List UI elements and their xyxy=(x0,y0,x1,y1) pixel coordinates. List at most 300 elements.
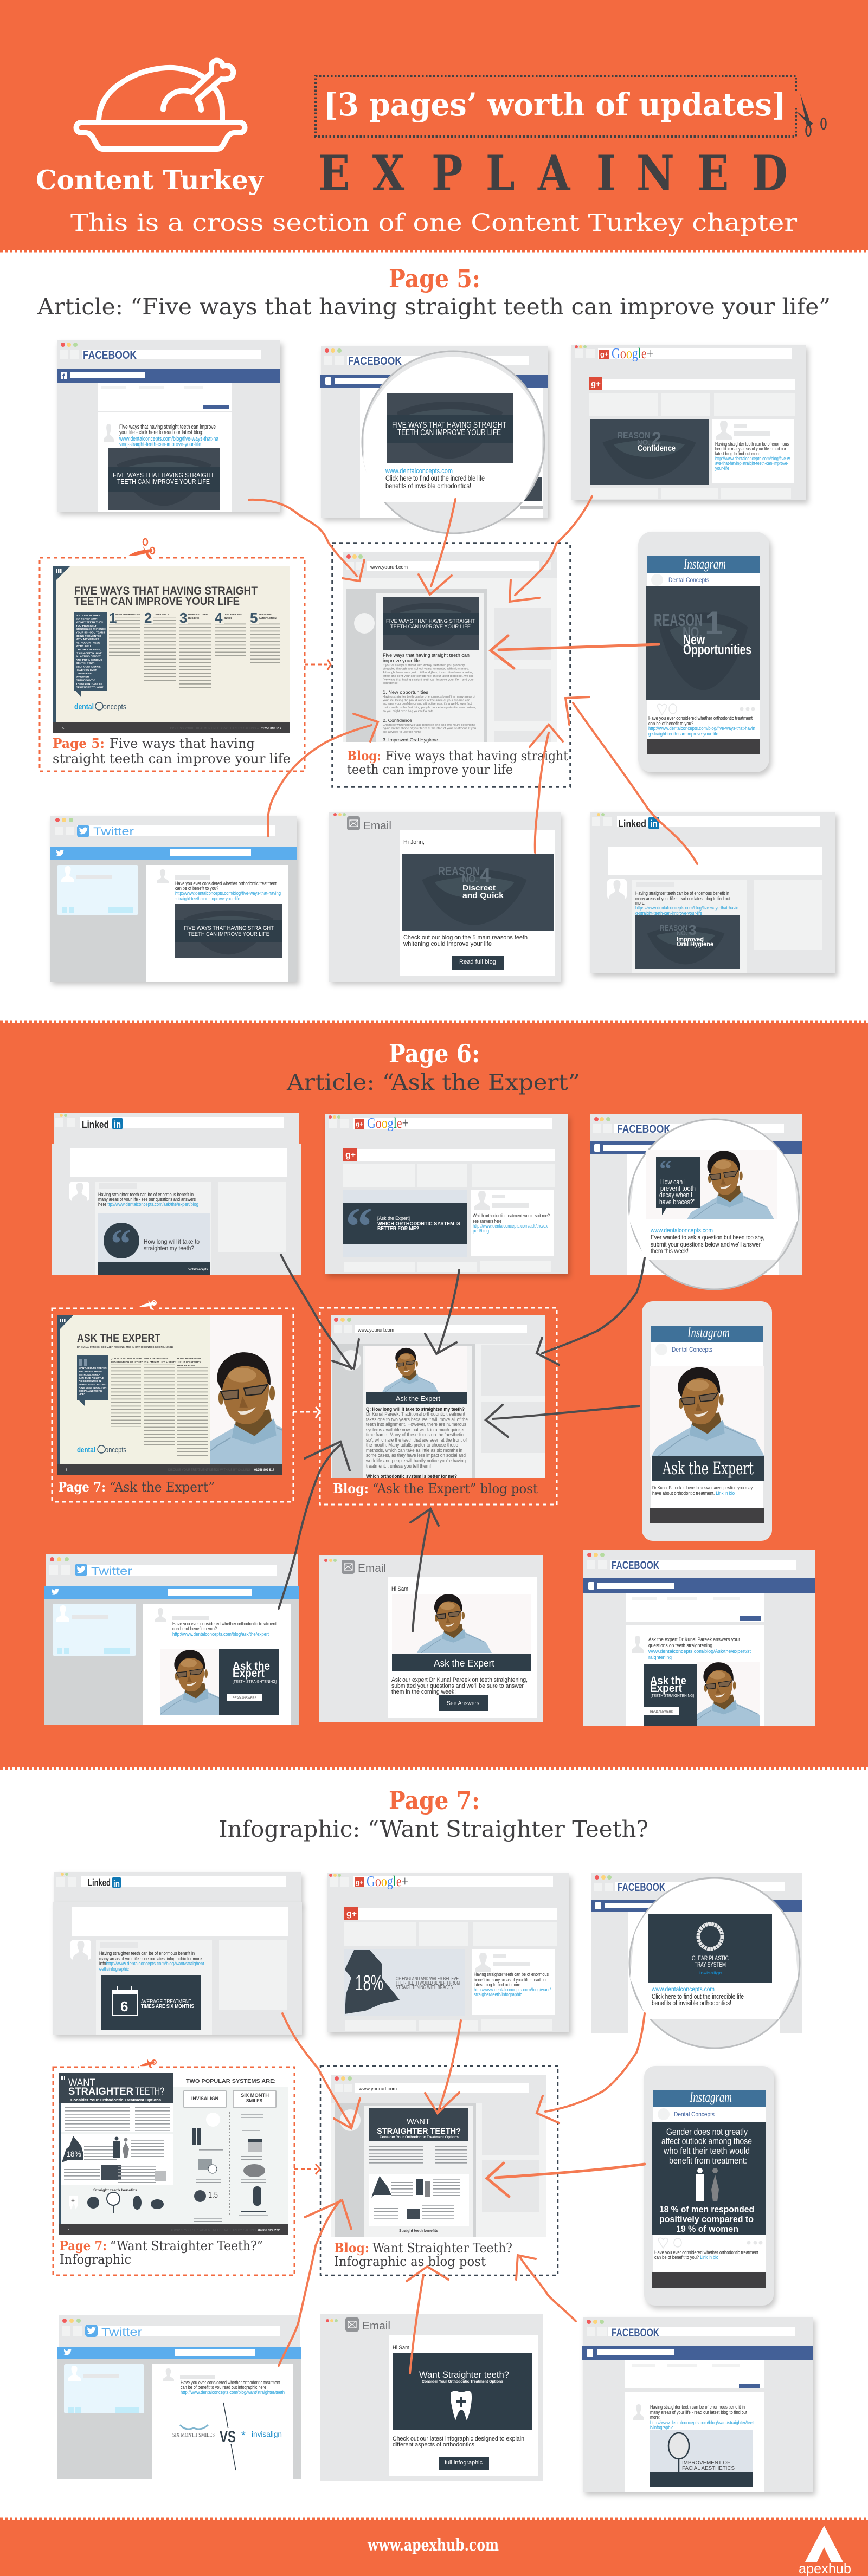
pull quote: CHILDHOOD JIBES, xyxy=(76,648,101,651)
window: facebook 4: Ask the expert Dr Kunal Pareek answers your xyxy=(648,1637,740,1643)
window: google plus: NO. xyxy=(637,438,650,447)
magnifier circle xyxy=(629,1119,799,1289)
phone: instagram 3: can be of benefit to you? Link in bio xyxy=(654,2255,718,2261)
pull quote: SELF-CONFIDENCE. xyxy=(76,666,101,669)
window: email 3: Check out our latest infographic designed to explain xyxy=(393,2436,524,2442)
pull quote: CAN TAKE AS LITTLE xyxy=(79,1377,104,1379)
window: google plus: http://www.dentalconcepts.com/blog/five-w xyxy=(715,456,790,462)
left text blocks xyxy=(61,2103,173,2185)
pull quote: YOUR SCHOOL YEARS xyxy=(76,631,105,634)
phone: instagram 3: Gender does not greatly xyxy=(666,2127,748,2137)
magnifier circle: them this week! xyxy=(651,1247,689,1255)
pull quote: YOU PROBABLY xyxy=(76,624,97,628)
window: facebook 6: IMPROVEMENT OF xyxy=(682,2460,730,2466)
cut-out headline box xyxy=(316,76,799,137)
arrows: section 3 xyxy=(279,2013,645,2373)
five numbered columns: DISCREET AND xyxy=(224,613,242,616)
like icons xyxy=(657,704,677,715)
window: twitter 3: Have you ever considered whether orthodontic treatment xyxy=(181,2380,280,2386)
section 2 band xyxy=(0,1022,868,1768)
window: facebook 1 xyxy=(57,340,280,512)
window: twitter 2: Ask the xyxy=(233,1660,270,1673)
window: facebook 2 with magnifier: FACEBOOK xyxy=(348,355,402,367)
pull quote: AS SIX MONTHS IN xyxy=(79,1380,101,1383)
three q&a columns: Q: HOW LONG WILL IT TAKE xyxy=(111,1357,142,1360)
window: google plus 2 xyxy=(325,1114,568,1274)
logo: oncepts xyxy=(105,1445,126,1455)
window: email 1: and Quick xyxy=(462,891,504,900)
window: linkedin 1: REASON xyxy=(660,924,687,933)
footer bar: 01256 893 517 xyxy=(254,1469,275,1472)
window: facebook 5 with magnifier xyxy=(591,1873,802,2048)
panel: blog page 7: STRAIGHTER TEETH? xyxy=(377,2127,461,2136)
window: google plus 2: BETTER FOR ME? xyxy=(377,1226,419,1232)
window: email 1: whitening could improve your life xyxy=(403,941,492,947)
phone: instagram 3: Have you ever considered whether orthodontic treatment xyxy=(654,2250,758,2256)
magnifier circle: www.dentalconcepts.com xyxy=(385,467,453,475)
blog text: work life and people will hardly notice you're having xyxy=(365,1458,466,1463)
window: google plus 2: “ xyxy=(345,1196,372,1256)
blog text: takes one to two years because it will move all of the xyxy=(366,1417,468,1422)
icon: scissors xyxy=(795,94,826,136)
magnifier circle: How can I xyxy=(660,1178,686,1186)
three q&a columns: TOOTH DECAY WHEN I xyxy=(177,1360,202,1364)
window: facebook 6: Having straighter teeth can be of enormous benefit in xyxy=(650,2404,745,2410)
window: google plus 3 xyxy=(327,1873,569,2032)
window: linkedin 2: in xyxy=(114,1119,121,1130)
pull quote: BEING TORMENTED xyxy=(76,635,101,638)
window: email 2: See Answers xyxy=(447,1700,479,1707)
phone: instagram 2: Ask the Expert xyxy=(662,1458,754,1479)
pull quote: LIFE" xyxy=(79,1393,85,1396)
panel: blog page 7: WANT xyxy=(407,2117,430,2126)
pull quote: WERE JUST xyxy=(76,645,91,648)
window: google plus: g+ xyxy=(591,379,601,389)
six month smiles vs invisalign: * xyxy=(241,2430,246,2442)
magnifier circle: prevent tooth xyxy=(660,1184,696,1192)
window: facebook 1: www.dentalconcepts.com/blog/five-ways-that-ha xyxy=(119,436,219,442)
window: twitter 3: Twitter xyxy=(101,2326,142,2339)
pull quote: TREATMENT CAN BE xyxy=(76,682,103,686)
window: facebook 6: FACIAL AESTHETICS xyxy=(682,2465,735,2471)
window: facebook 4: [TEETH STRAIGHTENING] xyxy=(651,1694,694,1698)
blog text: your life. Being the proud owner of the smile of your dreams can xyxy=(383,699,470,702)
footer bar xyxy=(57,1464,282,1475)
icon: turkey xyxy=(76,61,245,149)
panel: article page 5 xyxy=(40,539,305,771)
window: google plus xyxy=(571,345,806,500)
window: linkedin 1: Linked xyxy=(618,818,646,829)
icon: email xyxy=(345,2317,359,2332)
section heading: page 7 xyxy=(218,1786,648,1842)
system comparison columns xyxy=(184,2091,276,2222)
caption: Blog: xyxy=(347,748,381,764)
panel: article page 6 xyxy=(52,1300,326,1502)
pull quote: HAVE YOU EVER xyxy=(76,669,98,672)
pull quote: SOCIAL AND WORK xyxy=(79,1390,102,1392)
window: google plus 3: http://www.dentalconcepts.com/blog/want/ xyxy=(474,1987,551,1993)
panel: blog page 7: Consider Your Orthodontic Treatment Options xyxy=(380,2135,459,2139)
blog text: struggled through your school years tormented with nicknames. xyxy=(383,668,469,671)
window: google plus 2: see answers here xyxy=(473,1218,501,1224)
arrow: magnifier to blog xyxy=(419,499,455,595)
blog text: again on the shade of your teeth at the start of your treatment. If you xyxy=(383,727,476,731)
caption: teeth can improve your life xyxy=(347,762,513,777)
magnifier circle: invisalign xyxy=(699,1972,722,1975)
window: google plus 2: Google+ xyxy=(367,1115,409,1131)
phone: instagram 1: g-straight-teeth-can-improve-your-life xyxy=(648,731,718,737)
window: google plus 3: straigher/teeth/infographic xyxy=(474,1992,522,1998)
window: facebook 4: raightening xyxy=(648,1655,672,1661)
phone: instagram 3: Dental Concepts xyxy=(674,2110,715,2118)
panel: article page 5: TEETH CAN IMPROVE YOUR LIFE xyxy=(74,595,240,608)
logo wordmark: Content Turkey xyxy=(36,164,265,196)
window: google plus 3: OF ENGLAND AND WALES BELIEVE xyxy=(396,1976,459,1982)
pull quote: ORTHODONTIC xyxy=(76,679,95,682)
window: email 2: Email xyxy=(358,1563,386,1574)
pull quote xyxy=(74,612,107,698)
window: twitter 2: http://www.dentalconcepts.com/blog/ask/the/expert xyxy=(172,1631,269,1637)
window: facebook 1: ving-straight-teeth-can-improve-your-life xyxy=(119,441,201,448)
window: facebook 4: FACEBOOK xyxy=(612,1559,659,1572)
phone: instagram 2: Instagram xyxy=(687,1325,730,1340)
window: email 1: REASON xyxy=(438,864,480,878)
subtitle: This is a cross section of one Content Turkey chapter xyxy=(70,209,798,237)
window: google plus 2: WHICH ORTHODONTIC SYSTEM IS xyxy=(377,1221,460,1227)
arrow: article to blog xyxy=(305,660,331,670)
panel: blog page 7: www.yoururl.com xyxy=(358,2086,397,2091)
window: twitter 3: can be of benefit to you read out infographic here xyxy=(181,2385,266,2391)
five numbered columns: 4 xyxy=(215,610,223,626)
window: linkedin 1: https://www.dentalconcepts.com/blog/five-ways-that-havin xyxy=(635,905,738,911)
hero image xyxy=(108,448,220,510)
blog text xyxy=(383,653,476,743)
window: linkedin 3: infohttp://www.dentalconcepts.com/blog/want/straigher/t xyxy=(99,1961,204,1967)
window: facebook 2 with magnifier xyxy=(320,346,548,533)
caption: Five ways that having xyxy=(110,736,255,751)
arrow: google plus to blog xyxy=(425,2020,461,2113)
window: google plus: Confidence xyxy=(638,444,676,453)
window: facebook 4: Ask the xyxy=(650,1675,686,1687)
window: linkedin 1: 3 xyxy=(689,922,696,938)
window: google plus 3: STRAIGHTENING WITH BRACES xyxy=(396,1985,453,1991)
window: linkedin 3: Linked xyxy=(88,1877,111,1888)
caption: Infographic as blog post xyxy=(334,2254,486,2269)
system comparison columns: SMILES xyxy=(246,2098,262,2103)
arrows: section 1 xyxy=(249,496,697,864)
phone: instagram 2: have about orthodontic treatment. Link in bio xyxy=(652,1490,735,1496)
system comparison columns: 1.5 xyxy=(208,2191,218,2200)
panel: blog page 5: www.yoururl.com xyxy=(370,564,408,570)
magnifier circle: FIVE WAYS THAT HAVING STRAIGHT xyxy=(392,421,506,430)
window: linkedin 1: NO. xyxy=(677,929,687,937)
window: twitter 2: Twitter xyxy=(91,1565,132,1578)
window: facebook 6: many areas of your life - read our latest blog to find out xyxy=(650,2410,747,2416)
pull quote: ALTHOUGH THESE xyxy=(76,641,100,644)
panel: blog page 5: FIVE WAYS THAT HAVING STRAIGHT xyxy=(386,618,475,624)
footer bar xyxy=(59,2224,288,2235)
phone: instagram 1: Opportunities xyxy=(683,641,751,657)
blog text: effect and dent your self-confidence. In our latest blog post, we list xyxy=(383,675,473,678)
five numbered columns: CONFIDENCE xyxy=(153,613,169,616)
section heading: page 5: Article: “Five ways that having straight teeth can improve your life” xyxy=(37,294,831,320)
window: google plus: 2 xyxy=(652,429,661,448)
phone: instagram 1: NO. xyxy=(683,624,702,641)
arrow: google plus to blog xyxy=(510,496,592,602)
window: email 1: Discreet xyxy=(462,883,496,893)
six month smiles vs invisalign: SIX MONTH SMILES xyxy=(172,2432,215,2438)
window: google plus 3: g+ xyxy=(346,1909,357,1919)
window: email 1: Email xyxy=(363,820,391,832)
window: twitter 1: Have you ever considered whether orthodontic treatment xyxy=(175,881,277,887)
caption: “Ask the Expert” blog post xyxy=(372,1481,538,1496)
arrow: instagram to blog xyxy=(491,636,659,668)
caption: Infographic xyxy=(60,2252,131,2267)
five numbered columns: IMPROVED ORAL xyxy=(188,613,209,616)
window: linkedin 3: in xyxy=(113,1878,120,1889)
pull quote: CONSIDERED xyxy=(76,672,94,675)
blog text: Five ways that having straight teeth can xyxy=(383,653,470,658)
window: email 2: submitted your questions and we'll be sure to answer xyxy=(391,1683,524,1689)
panel: article page 5: FIVE WAYS THAT HAVING STRAIGHT xyxy=(74,585,258,597)
panel: blog page 6 xyxy=(320,1308,557,1505)
window: google plus 2: Which orthodontic treatment would suit me? xyxy=(473,1213,550,1219)
phone: instagram 3: Instagram xyxy=(689,2089,732,2105)
caption: Blog: xyxy=(334,2240,369,2256)
three q&a columns: HAVE BRACES? xyxy=(177,1364,195,1367)
window: facebook 6: more: xyxy=(650,2414,660,2420)
panel: article page 6: DR KUNAL PAREEK, BDS MJDF RCS(ENG) MSC IN ORTHODONTICS GDC NO. 105817 xyxy=(77,1346,173,1349)
window: google plus 2: [Ask the Expert] xyxy=(377,1216,410,1221)
three q&a columns: HOW CAN I PREVENT xyxy=(177,1357,201,1360)
icon: scissors xyxy=(139,1300,156,1310)
section heading: page 5 xyxy=(37,264,831,320)
window: twitter 1: http://www.dentalconcepts.com/blog/five-ways-that-having xyxy=(175,890,281,896)
window: google plus 3: latest blog to find out more: xyxy=(474,1982,522,1988)
window: twitter 3: http://www.dentalconcepts.com/blog/want/straighter/teeth xyxy=(181,2390,285,2396)
window: linkedin 3 xyxy=(53,1872,302,2035)
window: google plus 3: benefit in many areas of your life - read our xyxy=(474,1977,547,1983)
caption: Page 5: xyxy=(53,735,105,751)
footer bar: 7 xyxy=(67,2229,69,2232)
five numbered columns: SATISFACTION xyxy=(259,617,277,619)
blog text: that a smile is the first thing people notice in a potential new partner, xyxy=(383,706,476,709)
window: facebook 5 with magnifier: FACEBOOK xyxy=(618,1881,665,1894)
window: facebook 4: questions on teeth straightening xyxy=(648,1643,712,1649)
magnifier circle: benefits of invisible orthodontics! xyxy=(652,1999,731,2007)
window: facebook 4: READ ANSWERS xyxy=(650,1710,673,1714)
logo xyxy=(77,1445,126,1455)
magnifier circle: www.dentalconcepts.com xyxy=(650,1226,713,1234)
window: linkedin 3: AVERAGE TREATMENT xyxy=(141,1999,191,2005)
footer bar xyxy=(53,722,290,733)
window: linkedin 2: many areas of your life - see our questions and answers xyxy=(98,1197,196,1203)
caption xyxy=(347,748,568,777)
arrow: email to blog xyxy=(530,725,563,853)
phone: instagram 1: REASON xyxy=(654,610,703,630)
window: linkedin 1: in xyxy=(650,818,658,829)
window: google plus 2: http://www.dentalconcepts.com/ask/the/ex xyxy=(473,1223,548,1229)
panel: blog page 6: www.yoururl.com xyxy=(357,1327,394,1333)
arrows: section 2 xyxy=(279,1255,645,1631)
phone: instagram 1: Instagram xyxy=(683,556,726,572)
straight teeth benefits: + xyxy=(71,2197,75,2204)
title: explained: EXPLAINED xyxy=(318,145,788,202)
section heading: page 6: Article: “Ask the Expert” xyxy=(286,1069,580,1095)
system comparison columns: INVISALIGN xyxy=(191,2096,218,2101)
window: email 3: full infographic xyxy=(445,2459,483,2466)
window: facebook 6: h/infographic xyxy=(650,2425,673,2431)
apexhub logo xyxy=(799,2526,851,2576)
window: google plus: benefit in many areas of your life - read our xyxy=(715,446,786,452)
window: twitter 2: can be of benefit to you? xyxy=(172,1626,217,1632)
logo: dental xyxy=(74,702,94,712)
hero image: TEETH CAN IMPROVE YOUR LIFE xyxy=(117,477,210,486)
phone: instagram 1: Dental Concepts xyxy=(668,576,709,584)
blog text: the mouth. Many adults prefer to choose these xyxy=(366,1442,458,1448)
window: google plus 3: Having straighter teeth can be of enormous xyxy=(474,1972,549,1978)
blog text: methods, which can take as little as six months in xyxy=(366,1448,462,1453)
pull quote: A LASTING EFFECT xyxy=(76,655,101,658)
logo: dental xyxy=(77,1445,95,1455)
section heading: page 7: Page 7: xyxy=(389,1786,480,1815)
pull quote: WITH NICKNAMES. xyxy=(76,638,100,641)
blog text: time frame. Many of these focus on the 'aesthetic xyxy=(366,1432,464,1437)
blog text: Having straighter teeth can be of enormous benefit in many areas of xyxy=(383,695,475,699)
five numbered columns xyxy=(109,610,280,688)
pull quote: TO CHOOSE THESE xyxy=(79,1370,102,1373)
panel: article page 7 infographic: TEETH? xyxy=(135,2086,164,2097)
three q&a columns: SYSTEM IS BETTER FOR ME? xyxy=(144,1360,177,1364)
window: email 2 xyxy=(319,1555,543,1722)
window: linkedin 2: Having straighter teeth can be of enormous benefit in xyxy=(98,1192,194,1198)
blog text: so you might even bag yourself a date. xyxy=(383,710,434,713)
window: email 3 xyxy=(320,2314,543,2481)
window: twitter 2: Expert xyxy=(233,1667,265,1680)
window: linkedin 1 xyxy=(590,812,835,973)
logo xyxy=(74,702,126,712)
three q&a columns xyxy=(111,1357,208,1457)
magnifier circle xyxy=(362,351,544,533)
magnifier circle: submit your questions below and we'll answer xyxy=(651,1241,761,1248)
window: twitter 1: TEETH CAN IMPROVE YOUR LIFE xyxy=(188,931,269,938)
blog text: increase your confidence and attractiveness; it's a well-known fact xyxy=(383,702,472,706)
logo: oncepts xyxy=(103,702,126,712)
blog text: 1. New opportunities xyxy=(383,689,428,695)
window: facebook 6: FACEBOOK xyxy=(612,2327,659,2339)
window: facebook 6 xyxy=(582,2317,813,2492)
magnifier circle: TEETH CAN IMPROVE YOUR LIFE xyxy=(397,428,501,437)
blog text: If you've always suffered with wonky teeth then you probably xyxy=(383,664,465,667)
phone: instagram 1 xyxy=(638,532,769,772)
phone: instagram 1: 1 xyxy=(705,605,723,641)
phone: instagram 2: Dr Kunal Pareek is here to answer any question you may xyxy=(652,1485,753,1491)
blog text: Dr Kunal Pareek: Traditional orthodontic treatment xyxy=(366,1411,465,1417)
panel: article page 7 infographic: Consider Your Orthodontic Treatment Options xyxy=(70,2099,161,2102)
phone: instagram 1: New xyxy=(683,631,705,648)
pull quote: IT CAN OFTEN HAVE xyxy=(76,651,102,655)
five numbered columns: HYGIENE xyxy=(188,617,199,619)
caption: Want Straighter Teeth? xyxy=(372,2241,512,2256)
map of england xyxy=(345,1950,400,2014)
window: twitter 1 xyxy=(50,816,297,982)
five numbered columns: 3 xyxy=(179,610,187,626)
panel: article page 7 infographic: TWO POPULAR SYSTEMS ARE: xyxy=(186,2078,276,2084)
magnifier circle: have braces?” xyxy=(659,1198,695,1206)
phone: instagram 1: can be of benefit to you? xyxy=(648,721,693,727)
caption: Page 7: xyxy=(58,1479,106,1495)
arrow: linkedin to blog xyxy=(282,2013,360,2128)
system comparison columns: SIX MONTH xyxy=(241,2093,269,2098)
phone: instagram 3: 18 % of men responded xyxy=(659,2204,754,2215)
window: google plus 2: g+ xyxy=(345,1151,356,1160)
pull quote: HAVE LESS IMPACT ON xyxy=(79,1386,106,1389)
panel: article page 7 infographic: STRAIGHTER xyxy=(68,2086,133,2097)
caption: Five ways that having straight xyxy=(385,748,568,764)
straight teeth benefits xyxy=(69,2188,164,2213)
section heading: page 7: Infographic: “Want Straighter Teeth? xyxy=(218,1816,648,1842)
window: twitter 1: FIVE WAYS THAT HAVING STRAIGHT xyxy=(184,925,274,932)
like icons xyxy=(658,2238,681,2248)
icon: teeth ring xyxy=(698,1924,722,1949)
five numbered columns: PERSONAL xyxy=(259,613,272,616)
caption xyxy=(53,735,291,766)
panel: article page 7 infographic xyxy=(53,2059,294,2275)
three q&a columns: WHICH ORTHODONTIC xyxy=(144,1357,169,1360)
doctor photo xyxy=(210,1352,282,1464)
window: email 2: Hi Sam xyxy=(391,1586,408,1592)
magnifier circle xyxy=(629,1878,800,2048)
window: linkedin 1: Improved xyxy=(677,935,704,943)
window: linkedin 2: dentalconcepts xyxy=(188,1268,208,1271)
icon: scissors xyxy=(140,2059,156,2068)
blog text: some cases, as they have less impact on social and xyxy=(366,1452,466,1458)
window: twitter 1: can be of benefit to you? xyxy=(175,886,218,892)
arrow: email to blog xyxy=(407,2267,448,2373)
window: google plus 3: 18% xyxy=(355,1971,383,1995)
icon: calendar xyxy=(112,1986,138,2016)
window: linkedin 1: Oral Hygiene xyxy=(677,940,713,948)
arrow: google plus to blog xyxy=(425,1270,459,1354)
arrow: instagram to blog xyxy=(487,2163,645,2197)
phone: instagram 1: http://www.dentalconcepts.com/blog/five-ways-that-havin xyxy=(648,726,755,732)
footer bar: 5 xyxy=(62,727,65,731)
arrow: facebook to blog xyxy=(537,1258,645,1365)
blog text: are advised to use the home xyxy=(383,731,421,734)
blog text: teeth into alignment. However, there are numerous xyxy=(366,1422,466,1427)
pull quote: METHODS, WHICH xyxy=(79,1373,100,1376)
section heading: page 5: Page 5: xyxy=(389,264,480,293)
blog text: improve your life xyxy=(383,658,420,663)
window: email 1: Hi John, xyxy=(403,839,425,845)
phone: instagram 3: affect outlook among those xyxy=(661,2136,752,2146)
panel: blog page 5 xyxy=(332,543,570,787)
footer bar: 01256 893 517 xyxy=(261,727,282,731)
window: email 1: Check out our blog on the 5 main reasons teeth xyxy=(403,934,528,941)
window: linkedin 3: Having straighter teeth can be of enormous benefit in xyxy=(99,1951,195,1957)
five numbered columns: QUICK xyxy=(224,617,232,619)
header band xyxy=(0,0,868,251)
icon: email xyxy=(342,1560,355,1574)
window: email 3: Consider Your Orthodontic Treatment Options xyxy=(422,2380,503,2384)
phone: instagram 2 xyxy=(642,1301,772,1541)
icon: mirror xyxy=(668,2433,689,2472)
window: google plus 3: THEIR TEETH WOULD BENEFIT FROM xyxy=(396,1980,460,1986)
window: google plus: REASON xyxy=(618,430,650,441)
icon: email xyxy=(347,816,360,830)
footer band xyxy=(0,2519,868,2576)
blog text: 2. Confidence xyxy=(383,718,412,723)
